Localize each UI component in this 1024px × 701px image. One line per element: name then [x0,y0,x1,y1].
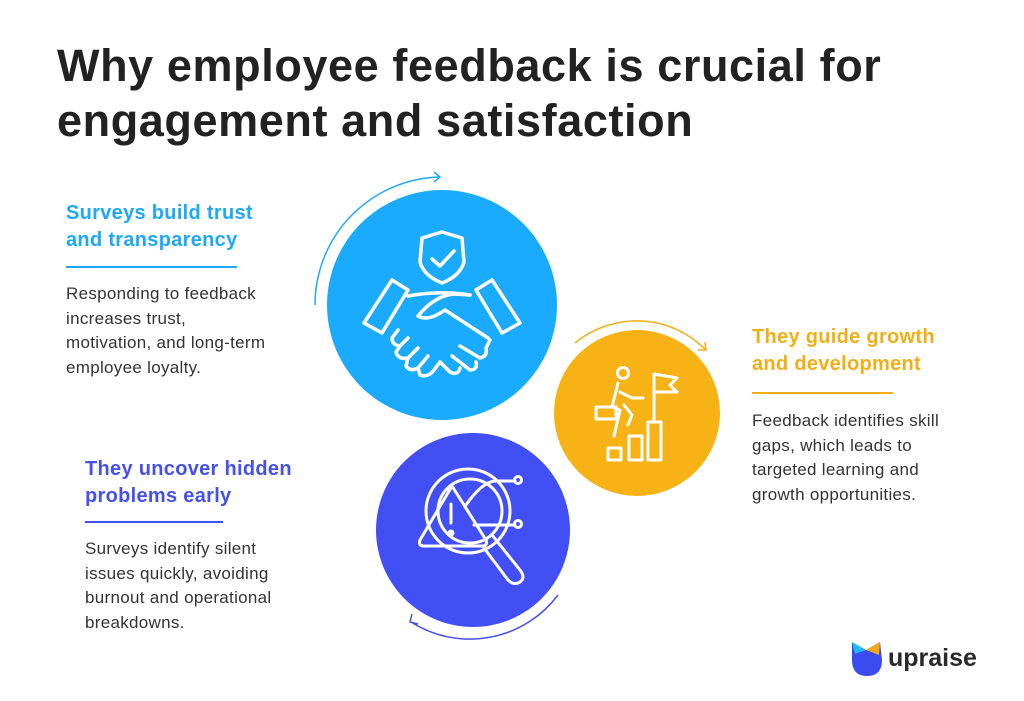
arrow: blue arc [315,172,440,305]
logo: upraise [852,642,977,676]
text block: trust: and transparency [66,229,238,251]
text block: problems: breakdowns. [85,612,185,632]
title [57,40,881,146]
logo: upraise: upraise [888,644,977,672]
title: engagement and satisfaction [57,95,693,146]
text block: growth: They guide growth [752,326,935,348]
arrow: orange arc [575,321,706,350]
text block: growth: gaps, which leads to [752,436,912,454]
text block: trust: motivation, and long-term [66,333,265,352]
text block: trust: increases trust, [66,308,186,328]
text block: growth: Feedback identifies skill [752,411,939,430]
text block: trust: Responding to feedback [66,284,256,303]
arrow: purple arc [410,595,558,639]
title: Why employee feedback is crucial for [57,40,881,91]
text block: growth: targeted learning and [752,460,919,479]
text block: growth: and development [752,353,921,375]
text block: problems: They uncover hidden [85,458,292,480]
text block: growth: growth opportunities. [752,484,916,504]
text block: problems: issues quickly, avoiding [85,564,269,582]
circle: problems [376,433,570,627]
text block: growth [752,326,939,504]
text block: trust [66,202,265,376]
circle: growth [554,330,720,496]
text block: problems: burnout and operational [85,588,272,607]
text block: problems [85,458,292,632]
text block: trust: employee loyalty. [66,358,201,376]
text block: problems: Surveys identify silent [85,539,256,558]
circle: trust [327,190,557,420]
text block: problems: problems early [85,485,232,507]
text block: trust: Surveys build trust [66,202,253,224]
